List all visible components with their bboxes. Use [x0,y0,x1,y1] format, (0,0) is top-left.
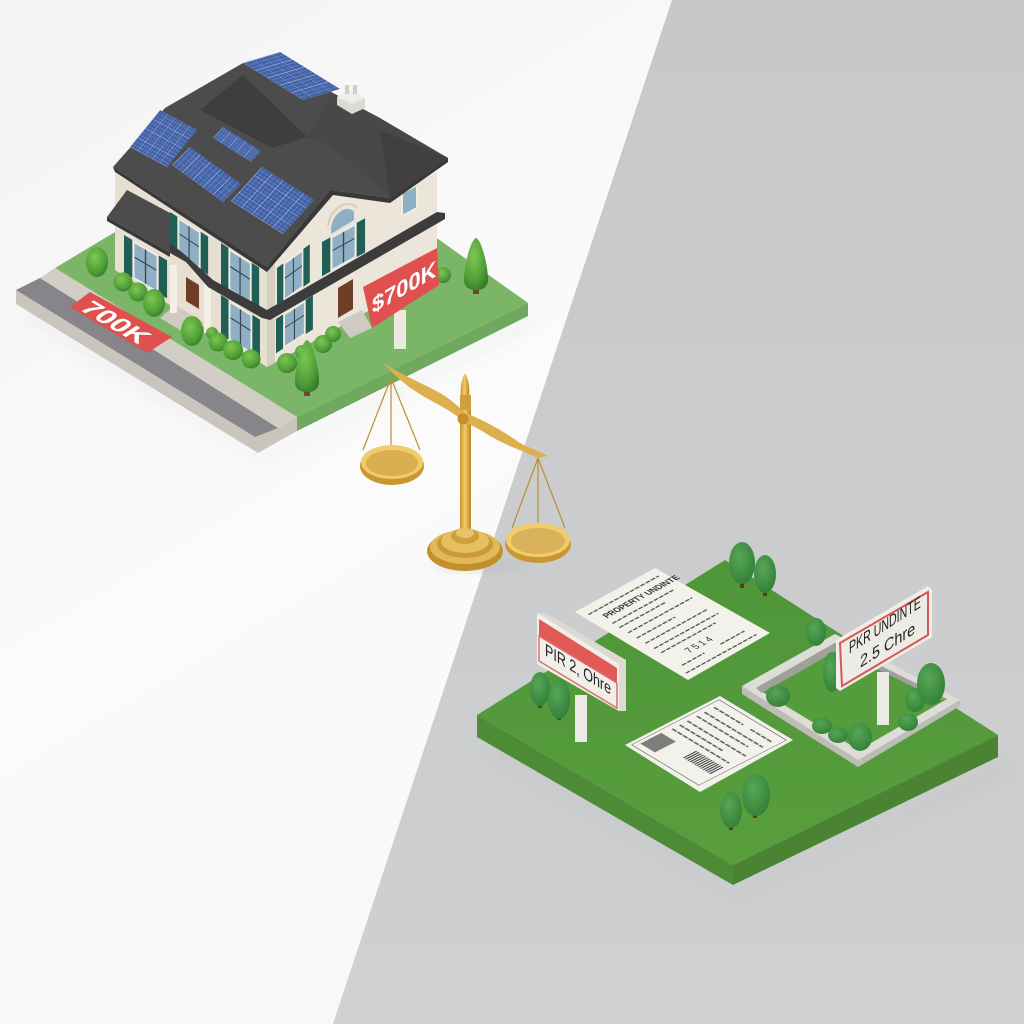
chimney [337,85,365,114]
bushes [86,247,451,373]
sign: PKR UNDINTE 2.5 Chre: PKR UNDINTE [849,592,921,658]
base [427,528,503,571]
ground sign: 700K: 700K [73,297,158,348]
porch columns and floor band [170,212,445,333]
finial and pivot [458,373,471,424]
price sign: $700K [363,248,439,349]
sign: PIR 2, Ohre [537,613,626,742]
land illustration [477,542,1010,898]
price sign: $700K: $700K [372,256,437,320]
background: gray right panel [333,0,1024,1024]
doors [160,277,372,338]
house walls [115,172,437,367]
solar panels [130,52,340,234]
sign: PKR UNDINTE 2.5 Chre: 2.5 Chre [860,618,915,672]
base shadow [430,559,530,573]
sign: PKR UNDINTE 2.5 Chre [836,586,932,725]
right pan [505,523,571,563]
beam [383,362,548,458]
document: deed [575,568,770,680]
fence trees [766,618,945,751]
front trees [720,774,770,830]
fenced plot [742,634,960,767]
left pan chains [363,378,420,470]
trees [295,238,488,396]
house illustration [16,52,535,464]
left trees [530,672,570,720]
ground sign: 700K [70,292,172,353]
document: deed: PROPERTY UNDINTE [600,574,682,619]
back trees [729,542,776,596]
sign: PIR 2, Ohre: PIR 2, Ohre [545,640,611,699]
document: receipt with barcode [625,696,793,792]
document: deed: 7 5 1 4 [682,635,717,655]
pole [460,400,471,535]
windows right wall [276,185,425,353]
left pan [360,445,424,485]
platform shadow [30,310,535,464]
balance scale [360,362,571,573]
land shadow [490,745,1010,898]
land plot [477,560,998,885]
platform: lawn and road [16,130,528,453]
right pan chains [512,458,565,545]
roof [107,52,448,272]
windows left wall [124,212,260,360]
